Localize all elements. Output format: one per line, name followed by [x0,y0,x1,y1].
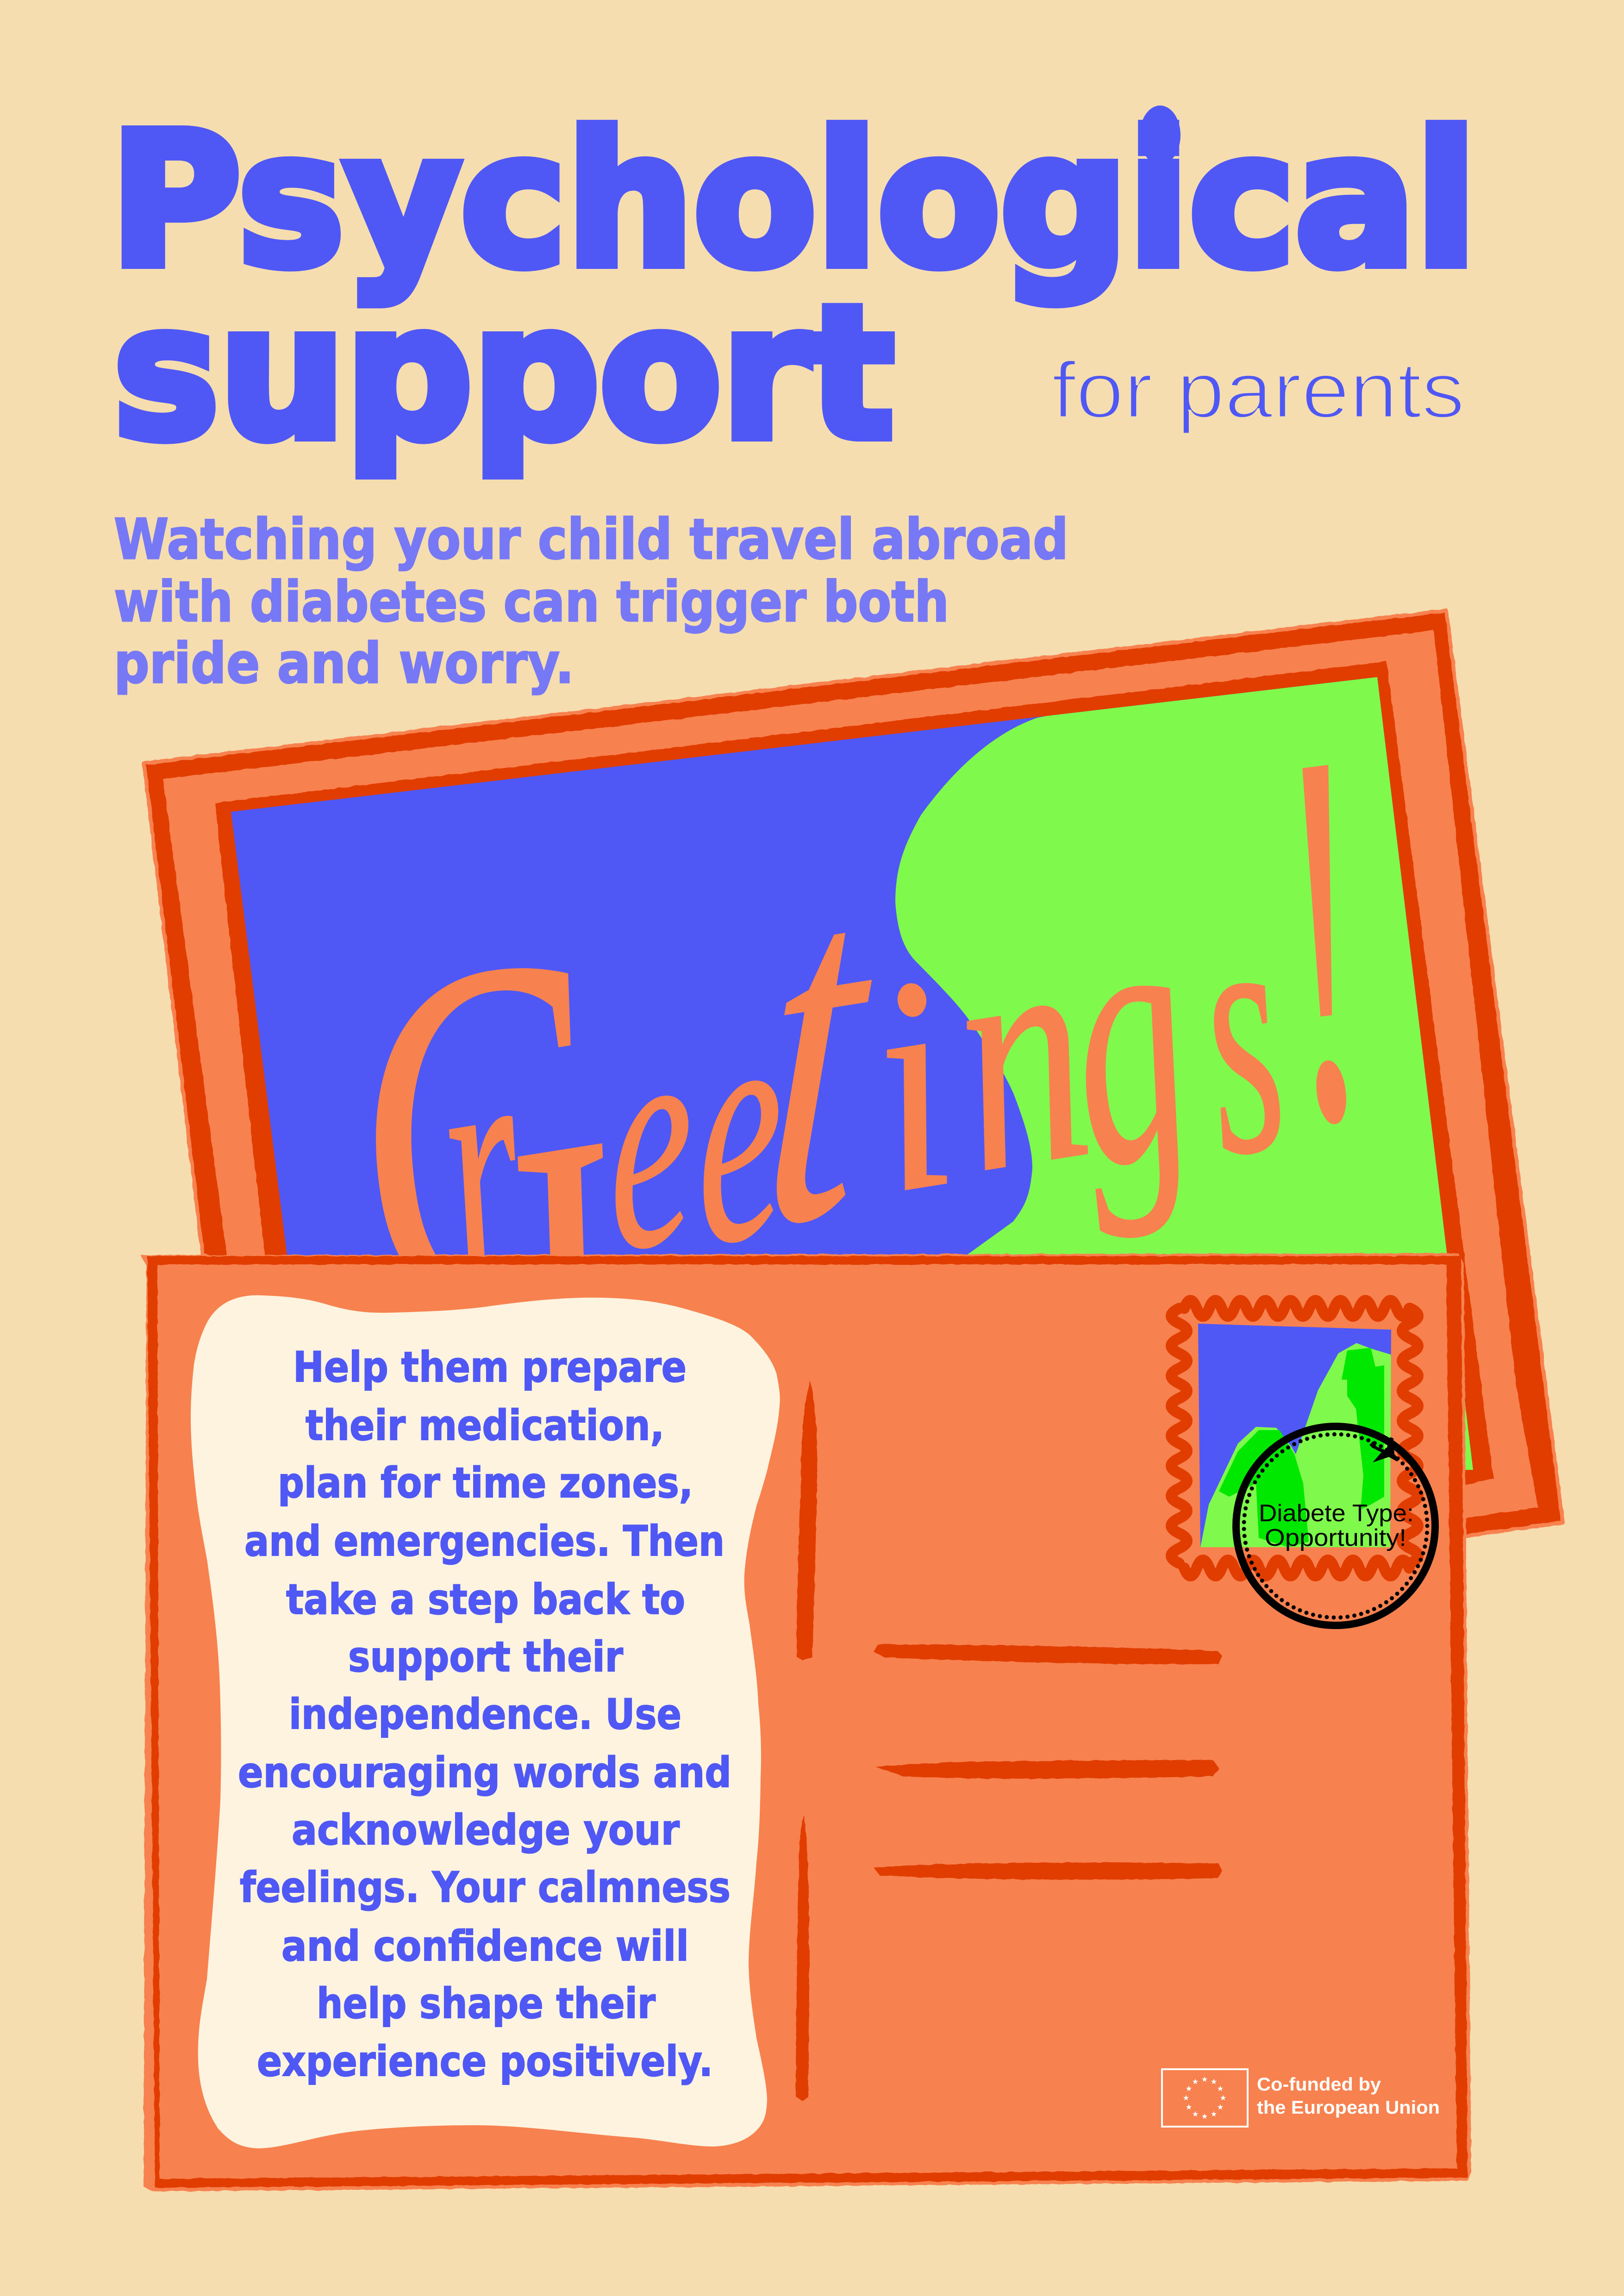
body text: help shape their [317,1979,656,2028]
postmark [1236,1426,1435,1625]
intro text [114,508,1068,696]
divider strokes [796,1381,818,2101]
stamp sky [1198,1324,1391,1547]
postmark text: Opportunity! [1265,1524,1406,1551]
body text: encouraging words and [238,1748,731,1797]
picture postcard [144,610,1563,1537]
EU stars [1183,2076,1226,2119]
lettering: Greetings! [312,639,1395,1431]
body text: support their [348,1633,624,1681]
envelope back [141,1253,1471,2191]
lettering: Greetings!: ! [1244,639,1395,1234]
lettering: Greetings!: e [606,963,695,1318]
body text: take a step back to [286,1575,685,1624]
postmark ring [1236,1426,1435,1625]
body text: feelings. Your calmness [240,1863,731,1912]
postcard frame [144,610,1563,1537]
title [110,94,1477,480]
title i-dot accent [1140,106,1181,165]
EU flag outline [1162,2069,1248,2127]
lettering: Greetings!: n [932,867,1110,1240]
lettering: Greetings!: g [1040,830,1214,1244]
postmark text [1259,1500,1414,1551]
EU co-funding logo [1162,2069,1440,2127]
EU funding text [1257,2074,1440,2118]
envelope body [141,1253,1471,2191]
body text: independence. Use [289,1690,681,1739]
title: support [113,267,894,480]
icon: airplane [1369,1437,1399,1462]
text blob [191,1295,780,2148]
subtitle: for parents: for parents [1052,346,1465,435]
body text: and confidence will [281,1922,689,1971]
body text: and emergencies. Then [244,1517,725,1566]
body text: acknowledge your [292,1806,680,1854]
postmark dotted ring [1244,1434,1427,1618]
address lines [873,1644,1222,1879]
lettering: Greetings!: r [414,969,553,1367]
EU funding text: Co-funded by [1257,2074,1381,2095]
postmark text: Diabete Type: [1259,1500,1414,1527]
EU funding text: the European Union [1257,2097,1440,2118]
stamp [1171,1300,1418,1576]
title: Psychological [110,94,1477,307]
postcard sky [231,677,1473,1470]
body text: plan for time zones, [278,1459,693,1507]
stamp mountains [1200,1343,1391,1547]
lettering: Greetings!: G [312,844,649,1431]
lettering: Greetings!: t [754,765,887,1332]
body text: experience positively. [257,2037,713,2086]
intro text: with diabetes can trigger both [114,570,949,635]
stamp scalloped frame [1171,1300,1418,1576]
lettering: Greetings!: e [694,940,786,1315]
body text [238,1343,731,2086]
body text: Help them prepare [293,1343,687,1392]
postcard green hill [895,677,1473,1470]
lettering: Greetings!: s [1173,834,1307,1230]
body text: their medication, [306,1401,664,1450]
envelope border [147,1256,1468,2188]
intro text: Watching your child travel abroad [114,508,1068,572]
lettering: Greetings!: i [849,912,973,1257]
intro text: pride and worry. [114,632,574,696]
